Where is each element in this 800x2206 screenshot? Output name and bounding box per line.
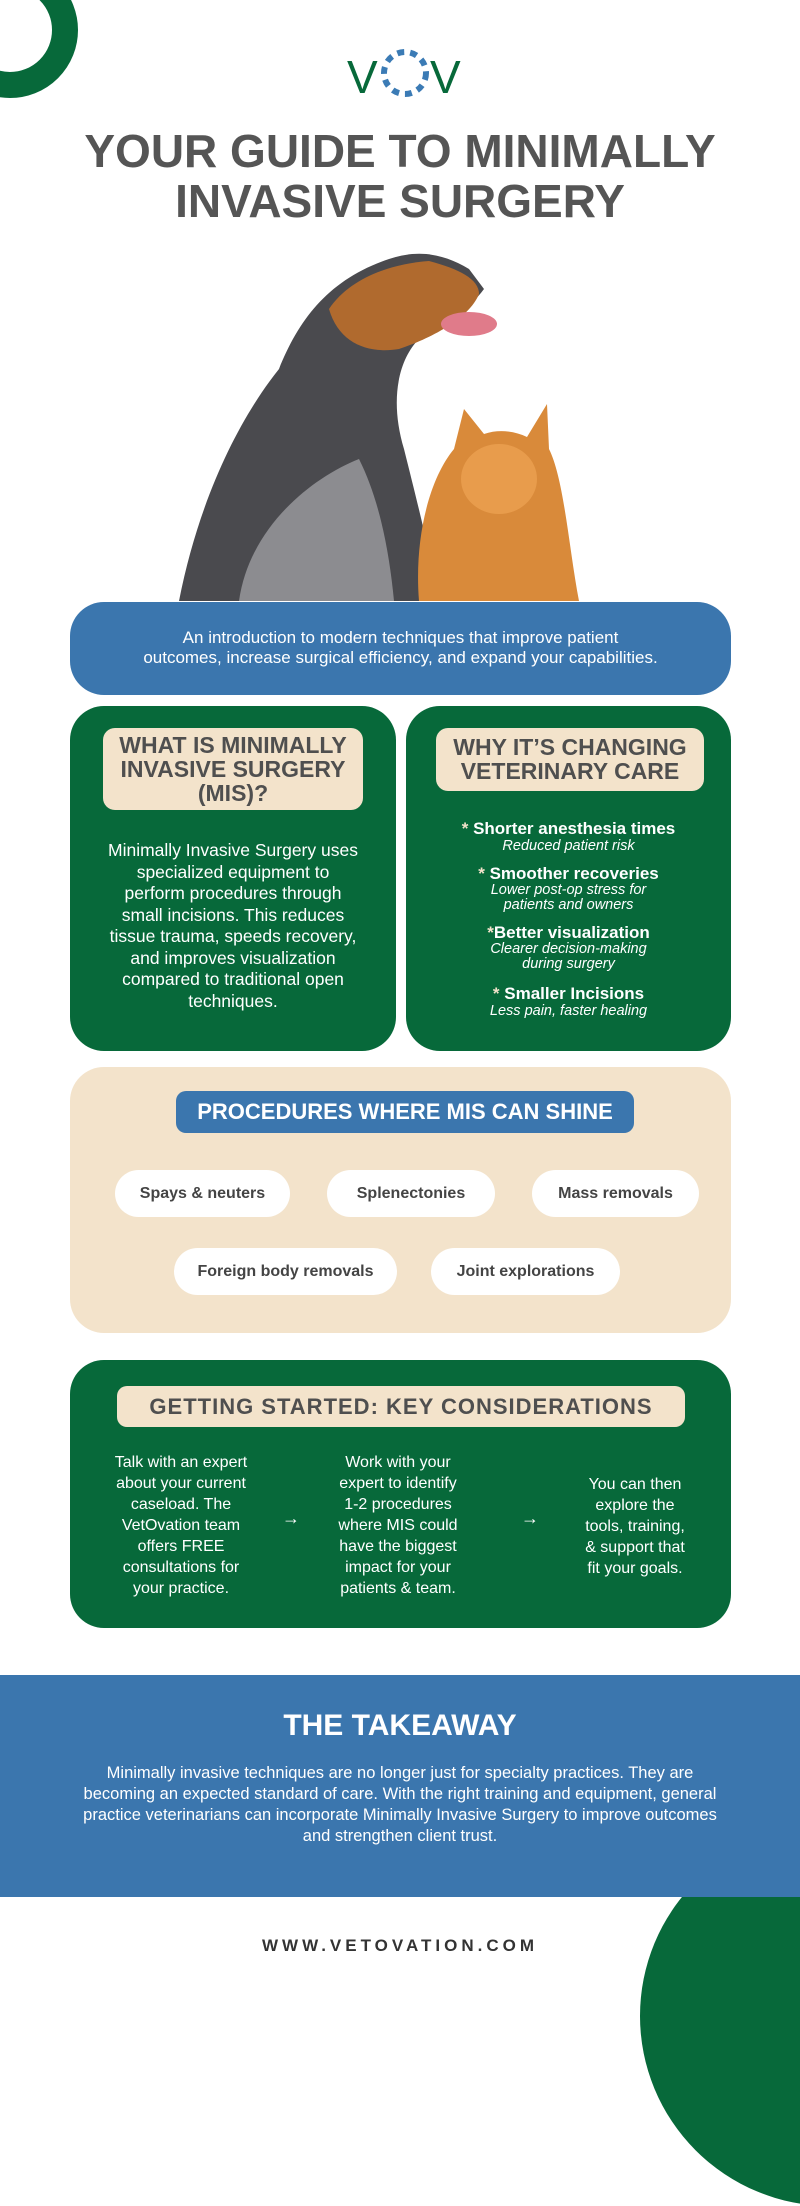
step 2: patients & team. (340, 1580, 456, 1597)
benefits list: patients and owners (504, 897, 633, 913)
step 2: where MIS could (338, 1517, 458, 1534)
step 2 (338, 1454, 458, 1597)
step 3: & support that (585, 1539, 685, 1556)
text: MIS definition: and improves visualization (130, 948, 336, 968)
arrow 1: → (282, 1508, 300, 1528)
step 3: You can then (589, 1476, 681, 1493)
benefits list: Clearer decision-making (490, 941, 647, 957)
heading: procedures (176, 1091, 634, 1133)
pill: foreign body: Foreign body removals (197, 1263, 374, 1280)
intro banner: An introduction to modern techniques that improve patient (183, 628, 618, 647)
text: takeaway (83, 1764, 717, 1845)
step 3: fit your goals. (587, 1560, 683, 1577)
title: INVASIVE SURGERY (175, 175, 625, 227)
step 1: your practice. (133, 1580, 229, 1597)
step 2: expert to identify (339, 1475, 457, 1492)
pill: joint explorations: Joint explorations (457, 1263, 594, 1280)
arrow 2: → (521, 1508, 539, 1528)
benefits list: * Smaller Incisions (493, 984, 644, 1003)
panel: why it's changing (406, 706, 731, 1051)
footer url: WWW.VETOVATION.COM (262, 1936, 538, 1955)
title (84, 125, 716, 227)
pill: mass removals (532, 1170, 699, 1217)
text: MIS definition: small incisions. This reduces (122, 904, 344, 924)
benefits list: * Shorter anesthesia times (462, 819, 675, 838)
step 1: about your current (116, 1475, 246, 1492)
takeaway band (0, 1675, 800, 1897)
step 1: Talk with an expert (115, 1454, 247, 1471)
benefits list (462, 819, 675, 1019)
text: takeaway: Minimally invasive techniques are no longer just for specialty practices. They are (107, 1764, 693, 1782)
step 2: Work with your (345, 1454, 451, 1471)
pill: spays (115, 1170, 290, 1217)
pill: foreign body (174, 1248, 397, 1295)
step 2: impact for your (345, 1559, 451, 1576)
benefits list: Less pain, faster healing (490, 1003, 647, 1019)
intro banner: outcomes, increase surgical efficiency, and expand your capabilities. (143, 648, 658, 667)
text: takeaway: practice veterinarians can incorporate Minimally Invasive Surgery to improve outcomes (83, 1806, 717, 1824)
panel: procedures (70, 1067, 731, 1333)
step 3: tools, training, (585, 1518, 685, 1535)
pill: joint explorations (431, 1248, 620, 1295)
step 1: VetOvation team (122, 1517, 240, 1534)
step 1: consultations for (123, 1559, 239, 1576)
benefits list: *Better visualization (487, 923, 650, 942)
pill: spays: Spays & neuters (140, 1185, 265, 1202)
decoration: top-left ring (0, 0, 78, 98)
text: MIS definition: techniques. (188, 990, 278, 1010)
benefits list: * Smoother recoveries (478, 864, 659, 883)
pill: splenectonies: Splenectonies (357, 1185, 465, 1202)
step 1: caseload. The (131, 1496, 231, 1513)
benefits list: during surgery (522, 956, 615, 972)
heading: why it's changing: VETERINARY CARE (461, 758, 679, 784)
heading: what is MIS (103, 728, 363, 810)
step 2: have the biggest (339, 1538, 457, 1555)
text: takeaway: becoming an expected standard of care. With the right training and equipment, general (84, 1785, 716, 1803)
decoration: bottom-right circle (640, 1826, 800, 2206)
heading: what is MIS: INVASIVE SURGERY (121, 756, 345, 782)
title: YOUR GUIDE TO MINIMALLY (84, 125, 716, 177)
heading: takeaway: THE TAKEAWAY (283, 1709, 517, 1742)
panel: getting started (70, 1360, 731, 1628)
heading: getting started: GETTING STARTED: KEY CONSIDERATIONS (149, 1394, 653, 1419)
step 2: 1-2 procedures (344, 1496, 452, 1513)
heading: why it's changing (436, 728, 704, 791)
benefits list: Lower post-op stress for (491, 882, 646, 898)
step 1 (115, 1454, 248, 1597)
text: MIS definition: tissue trauma, speeds recovery, (110, 926, 356, 946)
text: MIS definition: Minimally Invasive Surgery uses (108, 840, 358, 860)
text: MIS definition: specialized equipment to (137, 862, 329, 882)
heading: procedures: PROCEDURES WHERE MIS CAN SHINE (197, 1099, 613, 1124)
step 3 (585, 1476, 685, 1577)
benefits list: Reduced patient risk (502, 838, 635, 854)
illustration: dog and cat (179, 254, 579, 601)
intro banner (70, 602, 731, 695)
text: takeaway: and strengthen client trust. (303, 1827, 497, 1845)
step 3: explore the (595, 1497, 675, 1514)
heading: getting started (117, 1386, 685, 1427)
heading: what is MIS: WHAT IS MINIMALLY (119, 732, 347, 758)
pill: splenectonies (327, 1170, 495, 1217)
text: MIS definition: perform procedures through (125, 883, 341, 903)
panel: what is MIS (70, 706, 396, 1051)
heading: why it's changing: WHY IT’S CHANGING (453, 734, 687, 760)
step 1: offers FREE (138, 1538, 224, 1555)
text: MIS definition: compared to traditional open (122, 969, 344, 989)
logo (347, 49, 461, 100)
heading: what is MIS: (MIS)? (198, 780, 268, 806)
pill: mass removals: Mass removals (558, 1185, 673, 1202)
text: MIS definition (108, 840, 358, 1010)
